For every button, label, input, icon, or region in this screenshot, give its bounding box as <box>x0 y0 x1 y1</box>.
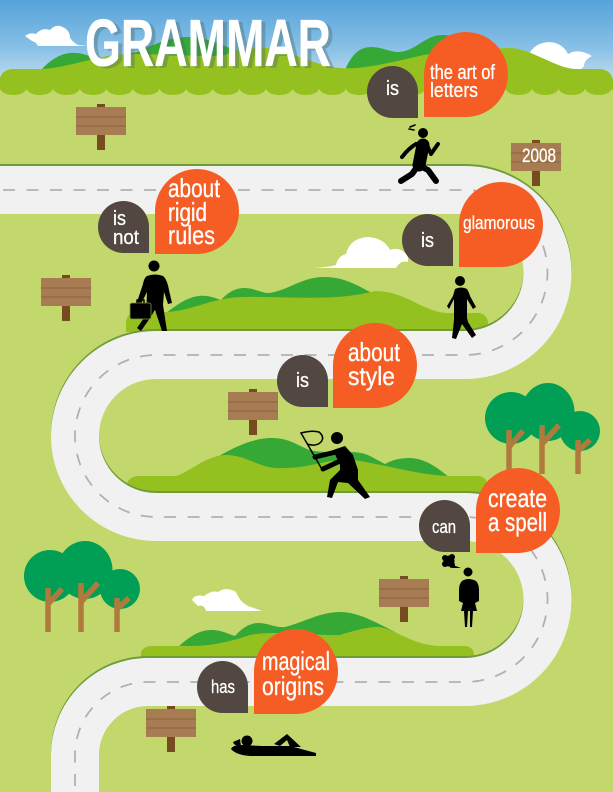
figure: walking man <box>447 276 476 339</box>
bubble pair: can / create a spell: create <box>488 483 547 513</box>
sky <box>0 0 613 85</box>
scalloped edge of band <box>0 80 613 95</box>
cloud top right <box>512 42 592 74</box>
bubble pair: is / glamorous <box>402 182 543 267</box>
figure: woman with thought <box>442 554 479 627</box>
sign: right lower <box>379 576 429 622</box>
bubble pair: is / the art of letters: is <box>386 78 399 100</box>
title <box>85 6 335 83</box>
bubble pair: is / the art of letters <box>367 32 508 118</box>
figure: man with butterfly net <box>301 431 370 499</box>
bubble pair: can / create a spell: a spell <box>488 507 547 537</box>
sign: centre <box>228 389 278 435</box>
sign: top left <box>76 104 126 150</box>
cloud top left <box>25 26 88 46</box>
top hills front band <box>0 48 613 89</box>
road <box>0 190 548 792</box>
bubble pair: has / magical origins <box>197 629 338 714</box>
bubble pair: is / about style: style <box>348 361 395 391</box>
bubble pair: has / magical origins: origins <box>262 671 324 701</box>
sign: 2008: 2008 <box>522 146 556 167</box>
bubble pair: has / magical origins: magical <box>262 646 330 676</box>
cloud middle <box>315 237 408 268</box>
bubble pair: is not / about rigid rules: about <box>168 173 221 203</box>
sign: 2008 <box>511 140 561 186</box>
bubble pair: is / about style <box>277 323 417 408</box>
figure: man with briefcase <box>130 260 172 331</box>
hills group lower <box>141 612 474 660</box>
title: GRAMMAR <box>89 8 335 83</box>
sign: bottom <box>146 706 196 752</box>
bubble pair: is not / about rigid rules: is <box>113 208 126 230</box>
road edge <box>0 188 548 792</box>
trees left <box>24 541 140 632</box>
bubble pair: is not / about rigid rules: rules <box>168 220 215 250</box>
sign: left <box>41 275 91 321</box>
bubble pair: is / glamorous: is <box>421 230 434 252</box>
bubble pair: is / glamorous: glamorous <box>463 213 535 233</box>
hills group middle <box>126 438 488 496</box>
bubble pair: is / about style: is <box>296 370 309 392</box>
cloud lower <box>192 589 262 611</box>
bubble pair: has / magical origins: has <box>211 677 235 697</box>
top hills back <box>41 35 500 80</box>
trees right <box>485 383 600 474</box>
bubble pair: can / create a spell: can <box>432 517 456 537</box>
bubble pair: can / create a spell <box>419 468 560 553</box>
bubble pair: is not / about rigid rules <box>98 169 239 254</box>
bubble pair: is / the art of letters: the art of <box>430 62 495 84</box>
hills group upper <box>126 277 488 332</box>
figure: lying man <box>231 734 316 756</box>
bubble pair: is / the art of letters: letters <box>430 80 478 102</box>
figure: running man <box>401 125 438 181</box>
bubble pair: is not / about rigid rules: not <box>113 227 139 249</box>
title: GRAMMAR <box>85 6 331 81</box>
road centre dashes <box>3 190 548 790</box>
bubble pair: is / about style: about <box>348 337 401 367</box>
bubble pair: is not / about rigid rules: rigid <box>168 197 207 227</box>
